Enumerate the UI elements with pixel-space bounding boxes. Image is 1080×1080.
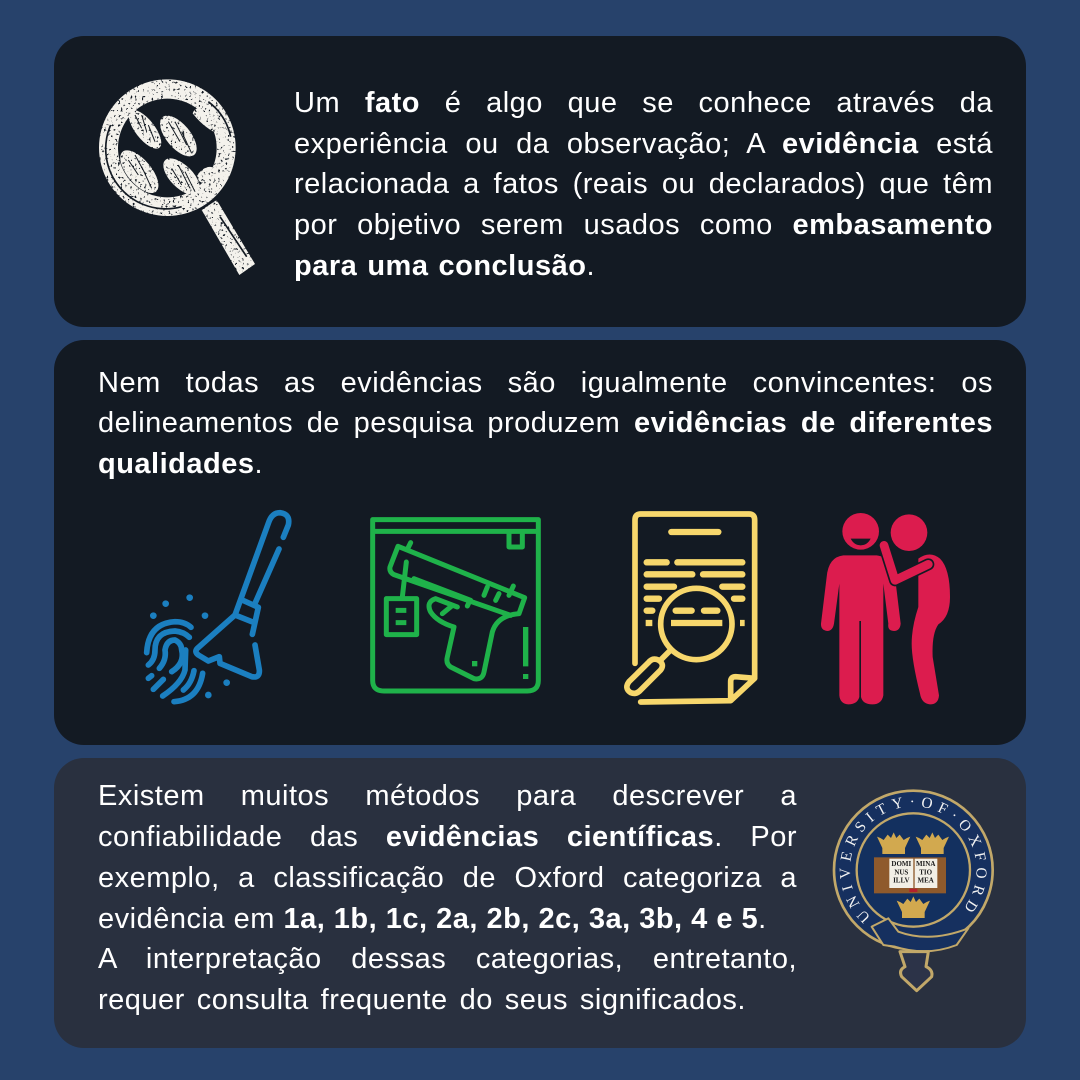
footprint hatching — [128, 115, 195, 192]
magnifier handle — [202, 200, 255, 275]
text lines — [647, 532, 742, 611]
open book: MINA — [916, 860, 935, 868]
left person — [842, 513, 879, 550]
open book: ILLV — [893, 877, 910, 885]
exclamation mark — [518, 627, 534, 679]
icon: document under magnifier — [624, 511, 758, 705]
panel: quality of evidence — [54, 340, 1026, 745]
text block: Oxford levels of evidence: exemplo, a classificação de Oxford categoriza a — [98, 862, 797, 894]
text block: definition of fact and evidence: por objetivo serem usados como embasamento — [294, 209, 993, 241]
crown bottom — [897, 896, 930, 918]
garter belt — [872, 918, 968, 951]
text block: Oxford levels of evidence: Existem muitos métodos para descrever a — [98, 780, 797, 812]
text block: evidence quality statement: delineamentos de pesquisa produzem evidências de diferentes — [98, 407, 993, 439]
brush handle — [235, 513, 289, 634]
right person's arm — [884, 545, 928, 580]
paper outline — [635, 514, 755, 702]
right person — [891, 514, 927, 551]
text block: definition of fact and evidence: para uma conclusão. — [294, 250, 595, 282]
footprint soles — [113, 105, 213, 201]
icon: two people whispering — [821, 513, 950, 704]
fingerprint — [147, 622, 203, 702]
icon: University of Oxford crest — [832, 789, 994, 992]
brush head — [196, 615, 259, 677]
smile — [851, 539, 871, 545]
open book: MEA — [917, 877, 934, 885]
pistol — [390, 543, 525, 679]
evidence tag — [386, 562, 417, 635]
open book: DOMI — [891, 860, 912, 868]
icon: magnifying glass over footprints — [99, 79, 255, 275]
open book: NUS — [894, 868, 908, 876]
crown right — [916, 832, 949, 854]
inner ring — [857, 813, 970, 927]
text block: evidence quality statement: qualidades. — [98, 448, 263, 480]
magnifier handle — [661, 650, 671, 660]
open book: TIO — [919, 868, 933, 876]
panel: fact and evidence definition — [54, 36, 1026, 327]
crown left — [877, 832, 910, 854]
magnifier lens — [661, 588, 732, 660]
powder dots — [150, 594, 230, 698]
text block: Oxford levels of evidence: confiabilidade das evidências científicas. Por — [98, 821, 797, 853]
text block: definition of fact and evidence: relacionada a fatos (reais ou declarados) que têm — [294, 168, 993, 200]
icon: University of Oxford crest: UNIVERSITY·OF·OXFORD — [840, 797, 987, 924]
crest lettering — [850, 807, 977, 917]
icon: brush dusting a fingerprint — [144, 510, 292, 704]
evidence bag — [373, 520, 538, 691]
text block: evidence quality statement — [98, 367, 993, 480]
text block: Oxford levels of evidence: A interpretação dessas categorias, entretanto, — [98, 943, 797, 975]
text block: definition of fact and evidence — [294, 87, 993, 282]
text block: Oxford levels of evidence: requer consulta frequente do seus significados. — [98, 984, 746, 1016]
text block: Oxford levels of evidence: evidência em 1a, 1b, 1c, 2a, 2b, 2c, 3a, 3b, 4 e 5. — [98, 903, 767, 935]
panel: Oxford classification — [54, 758, 1026, 1048]
icon: gun in evidence bag — [370, 517, 541, 694]
ring inner groove — [106, 102, 247, 257]
text block: evidence quality statement: Nem todas as evidências são igualmente convincentes: os — [98, 367, 993, 399]
belt pendant — [900, 952, 932, 991]
text block: Oxford levels of evidence — [98, 780, 797, 1016]
open book — [874, 857, 946, 893]
text block: definition of fact and evidence: Um fato é algo que se conhece através da — [294, 87, 993, 119]
outer ring — [834, 791, 993, 949]
text block: definition of fact and evidence: experiência ou da observação; A evidência está — [294, 128, 993, 160]
magnifier ring — [99, 79, 236, 216]
